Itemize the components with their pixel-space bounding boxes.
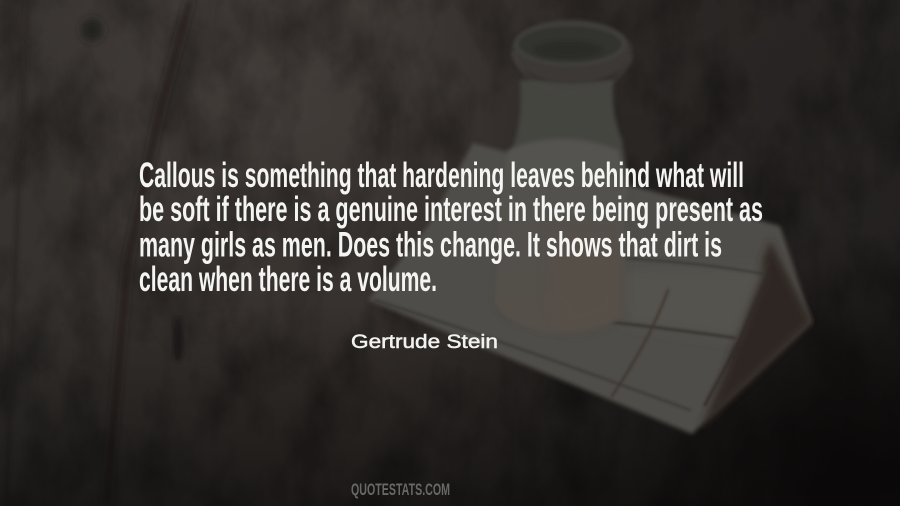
folded checked cloth	[368, 143, 812, 434]
milk bottle	[493, 20, 632, 334]
bottle rim	[512, 20, 632, 95]
quote text: clean when there is a volume.	[139, 260, 437, 299]
quote text	[139, 156, 763, 299]
author: Gertrude Stein	[351, 332, 498, 353]
source watermark: QUOTESTATS.COM	[351, 480, 450, 499]
